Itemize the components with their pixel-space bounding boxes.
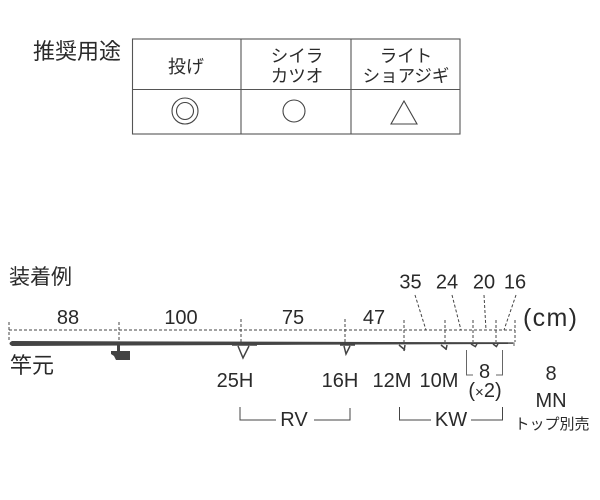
guide labels: 25H xyxy=(217,370,253,392)
guide: 12M xyxy=(399,345,405,351)
spacing dimension line xyxy=(9,295,516,344)
guide labels: 8 xyxy=(545,363,557,385)
reel seat xyxy=(111,345,130,360)
guide: 8 second xyxy=(493,344,498,347)
guide labels: (×2) xyxy=(468,380,502,402)
icon: circle xyxy=(283,100,305,122)
spacing labels: 88 xyxy=(57,307,79,329)
rod xyxy=(10,341,513,346)
column: shiira katsuo: シイラ xyxy=(271,46,323,66)
guide: 8 xyxy=(471,344,477,347)
guide: 10M xyxy=(441,345,447,350)
guide labels xyxy=(217,361,567,412)
guide labels: 8 xyxy=(479,361,490,383)
spacing labels: 100 xyxy=(164,307,198,329)
spacing labels: 24 xyxy=(436,272,458,294)
bracket: RV: RV xyxy=(280,409,308,431)
column: shiira katsuo: カツオ xyxy=(271,66,323,86)
guide labels: MN xyxy=(535,390,567,412)
guide labels: 16H xyxy=(322,370,358,392)
unit label: (cm) xyxy=(523,304,577,332)
spacing labels: 16 xyxy=(504,272,526,294)
spacing labels xyxy=(57,272,526,329)
column: light shore jigging: ライト xyxy=(380,46,432,66)
rod butt label: 竿元 xyxy=(10,353,54,378)
spacing labels: 20 xyxy=(473,272,495,294)
usage table xyxy=(132,39,460,134)
top guide note: トップ別売 xyxy=(514,416,590,433)
table grid xyxy=(132,39,460,134)
bracket: 8 x2 xyxy=(466,350,502,375)
column: light shore jigging: ショアジギ xyxy=(363,66,449,86)
bracket: KW xyxy=(400,407,502,431)
heading: mounting example: 装着例 xyxy=(9,266,72,289)
guide labels: 12M xyxy=(373,370,411,392)
icon: double circle xyxy=(172,98,198,124)
spacing labels: 75 xyxy=(282,307,304,329)
heading: recommended use: 推奨用途 xyxy=(33,39,121,64)
icon: triangle xyxy=(391,101,417,124)
spacing labels: 35 xyxy=(399,272,422,294)
bracket: RV xyxy=(240,407,350,431)
guides xyxy=(232,344,498,358)
guide: 16H xyxy=(340,345,355,354)
column: casting: 投げ xyxy=(168,57,204,77)
guide labels: 10M xyxy=(420,370,458,392)
tip ring xyxy=(508,343,514,346)
guide: 25H xyxy=(232,345,257,358)
spacing labels: 47 xyxy=(363,307,385,329)
bracket: KW: KW xyxy=(435,409,467,431)
